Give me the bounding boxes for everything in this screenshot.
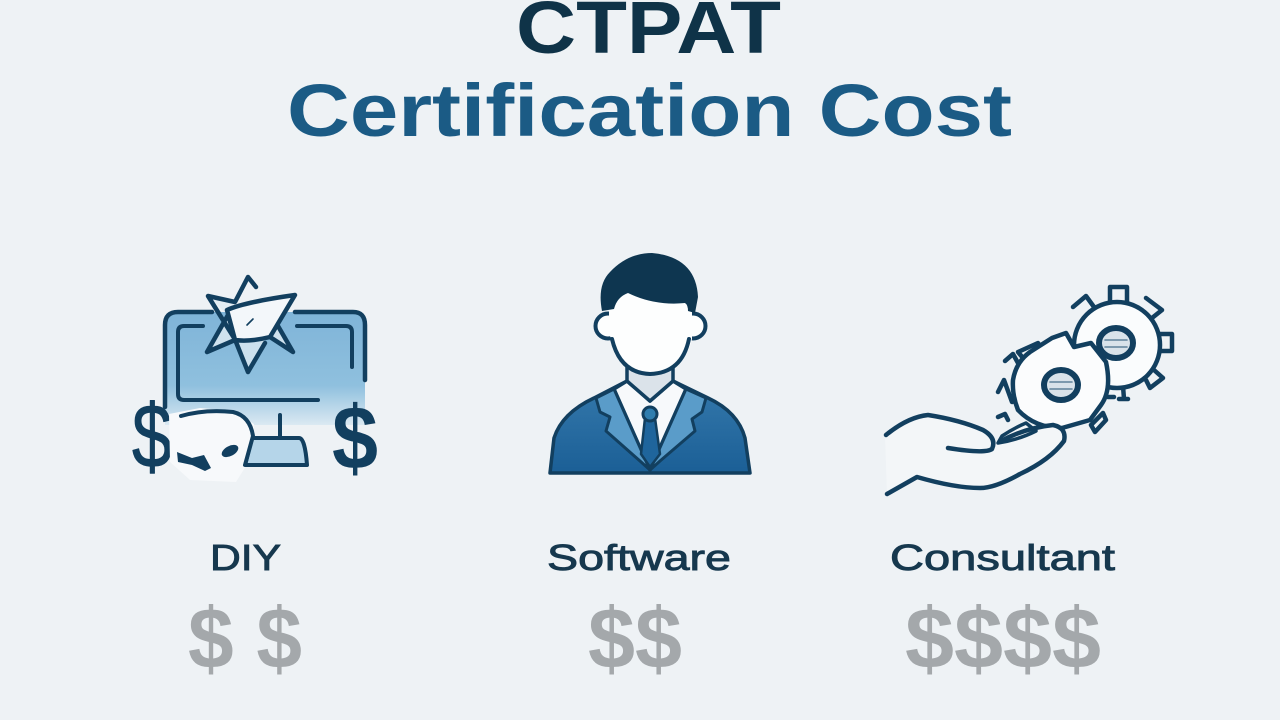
check tick: [247, 319, 253, 325]
right lapel: [650, 389, 706, 470]
front gear hole lines: [1050, 382, 1072, 389]
title line: Certification Cost: Certification Cost: [287, 69, 1012, 152]
right ear: [680, 314, 706, 338]
icon: DIY monitor with star and dollars: [132, 277, 378, 489]
cost: Software: $$: [588, 591, 682, 687]
label: DIY: DIY: [210, 537, 281, 578]
hand outline: [886, 415, 1065, 494]
smudge outline: [181, 411, 253, 465]
cost: Consultant: $$$$: [905, 591, 1101, 687]
dollar sign right: $: [332, 389, 378, 489]
left ear: [596, 314, 620, 338]
monitor stand: [245, 415, 307, 465]
back gear teeth: [1073, 287, 1172, 399]
star upper-left tip: [208, 296, 235, 315]
star kite: [227, 295, 295, 341]
star lower-left tip: [207, 315, 236, 352]
neck: [627, 365, 673, 401]
front gear wheel: [1013, 333, 1108, 428]
dollar sign left: $: [132, 387, 172, 487]
finger: [998, 423, 1036, 443]
suit body: [550, 381, 750, 473]
cost: DIY: $ $: [188, 591, 302, 687]
icon: software person: [550, 253, 750, 473]
icon: consultant hand with gears: [885, 287, 1172, 495]
tie: [641, 418, 660, 467]
title: [287, 0, 1012, 152]
jaw outline: [612, 339, 689, 374]
shirt: [614, 381, 686, 470]
front gear hole: [1044, 370, 1078, 400]
back gear wheel: [1074, 302, 1160, 388]
front gear teeth: [998, 343, 1114, 432]
dark oval: [220, 442, 240, 460]
star strokes: [207, 277, 293, 372]
monitor screen: [165, 312, 365, 425]
star lower-right tip: [270, 326, 293, 352]
label: Software: Software: [547, 537, 731, 578]
front gear: [998, 333, 1114, 432]
dark blobs: [177, 452, 211, 471]
star: [207, 277, 295, 372]
back gear: [1073, 287, 1172, 399]
tie knot: [643, 407, 657, 421]
monitor inner frame: [178, 326, 352, 400]
monitor outline: [165, 312, 365, 407]
left lapel: [596, 389, 650, 470]
label: Consultant: Consultant: [890, 537, 1115, 578]
white smudge: [169, 408, 254, 482]
face fill: [609, 290, 692, 373]
hair: [601, 253, 698, 313]
back gear hole lines: [1105, 340, 1127, 347]
star bottom tip: [236, 340, 265, 372]
hand fill: [885, 415, 1065, 495]
back gear hole: [1099, 328, 1133, 358]
